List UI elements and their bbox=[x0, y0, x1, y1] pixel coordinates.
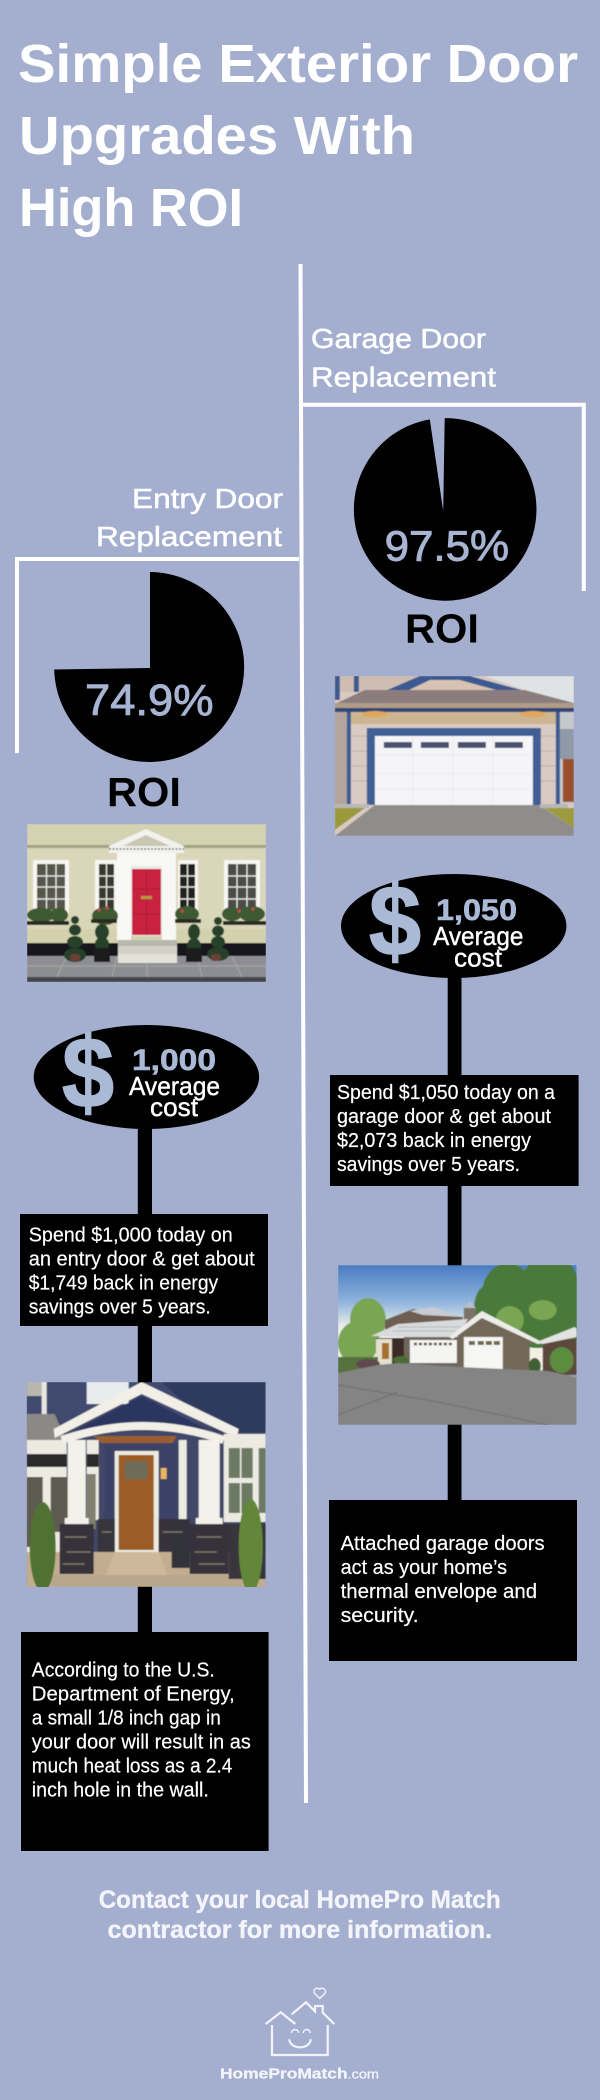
central white divider line bbox=[298, 264, 308, 1803]
garage bracket frame bbox=[302, 405, 584, 591]
cost badge: 1,050 average cost: cost bbox=[454, 943, 503, 973]
cost badge: 1,000 average cost: Average bbox=[129, 1071, 220, 1101]
icon: smiling house with heart bbox=[266, 1988, 334, 2055]
text box: thermal envelope bbox=[329, 1500, 577, 1661]
pie chart: 97.5% ROI bbox=[354, 418, 536, 601]
text box: heat loss fact: your door will result in as bbox=[32, 1731, 251, 1754]
logo wordmark: HomeProMatch .com bbox=[220, 2065, 379, 2082]
call to action: contractor for more information. bbox=[108, 1916, 492, 1944]
title: Upgrades With bbox=[19, 106, 415, 166]
text box: entry savings: $1,749 back in energy bbox=[29, 1272, 219, 1295]
text box: garage savings: Spend $1,050 today on a bbox=[337, 1081, 556, 1104]
entry stem bbox=[138, 1125, 152, 1635]
garage heading bbox=[311, 323, 496, 392]
title bbox=[18, 34, 578, 238]
text box: entry savings: savings over 5 years. bbox=[29, 1296, 211, 1319]
text box: thermal envelope: Attached garage doors bbox=[341, 1532, 545, 1555]
garage stem bbox=[448, 975, 462, 1505]
ROI label: ROI bbox=[405, 606, 479, 652]
pie chart: 97.5% ROI: 97.5% bbox=[385, 523, 509, 571]
text box: garage savings: $2,073 back in energy bbox=[337, 1129, 532, 1152]
text box: heat loss fact: much heat loss as a 2.4 bbox=[32, 1755, 232, 1778]
photo: red front door bbox=[27, 824, 266, 982]
title: Simple Exterior Door bbox=[18, 34, 578, 94]
text box: heat loss fact: Department of Energy, bbox=[32, 1683, 235, 1706]
cost badge: 1,050 average cost: 1,050 bbox=[436, 894, 517, 927]
call to action bbox=[99, 1886, 501, 1944]
panel: entry door bbox=[17, 483, 299, 1851]
cost badge: 1,000 average cost: $ bbox=[62, 1017, 114, 1129]
text box: garage savings: savings over 5 years. bbox=[337, 1153, 520, 1176]
call to action: Contact your local HomePro Match bbox=[99, 1886, 501, 1914]
text box: heat loss fact: According to the U.S. bbox=[32, 1659, 215, 1682]
garage heading: Garage Door bbox=[311, 323, 486, 354]
cost badge: 1,000 average cost: cost bbox=[150, 1092, 199, 1122]
entry heading bbox=[96, 483, 283, 552]
pie chart: 74.9% ROI bbox=[54, 572, 244, 762]
garage heading: Replacement bbox=[311, 362, 496, 392]
pie chart: 74.9% ROI: 74.9% bbox=[85, 676, 214, 725]
text box: entry savings bbox=[20, 1214, 268, 1326]
photo: house with driveway bbox=[338, 1265, 577, 1425]
ROI label: ROI bbox=[107, 769, 181, 815]
text box: garage savings bbox=[330, 1075, 579, 1186]
text box: heat loss fact bbox=[21, 1632, 269, 1851]
title: High ROI bbox=[19, 178, 243, 238]
entry bracket frame bbox=[17, 559, 299, 753]
cost badge: 1,000 average cost bbox=[34, 1017, 259, 1129]
text box: heat loss fact: inch hole in the wall. bbox=[32, 1779, 209, 1802]
entry heading: Entry Door bbox=[132, 483, 283, 514]
photo: garage door bbox=[334, 676, 574, 836]
photo: blue house with wooden door bbox=[26, 1382, 266, 1587]
text box: entry savings: an entry door & get about bbox=[29, 1248, 255, 1271]
cost badge: 1,000 average cost: 1,000 bbox=[132, 1044, 216, 1077]
text box: entry savings: Spend $1,000 today on bbox=[29, 1224, 233, 1247]
text box: thermal envelope: security. bbox=[341, 1604, 419, 1627]
cost badge: 1,050 average cost: Average bbox=[433, 921, 524, 951]
text box: heat loss fact: a small 1/8 inch gap in bbox=[32, 1707, 221, 1730]
panel: garage door bbox=[302, 323, 584, 1661]
text box: thermal envelope: thermal envelope and bbox=[341, 1580, 537, 1603]
cost badge: 1,050 average cost bbox=[341, 865, 566, 978]
text box: thermal envelope: act as your home’s bbox=[341, 1556, 507, 1579]
logo: HomePro Match bbox=[220, 1988, 379, 2082]
text box: garage savings: garage door & get about bbox=[337, 1105, 551, 1128]
entry heading: Replacement bbox=[96, 521, 282, 552]
cost badge: 1,050 average cost: $ bbox=[369, 865, 421, 977]
